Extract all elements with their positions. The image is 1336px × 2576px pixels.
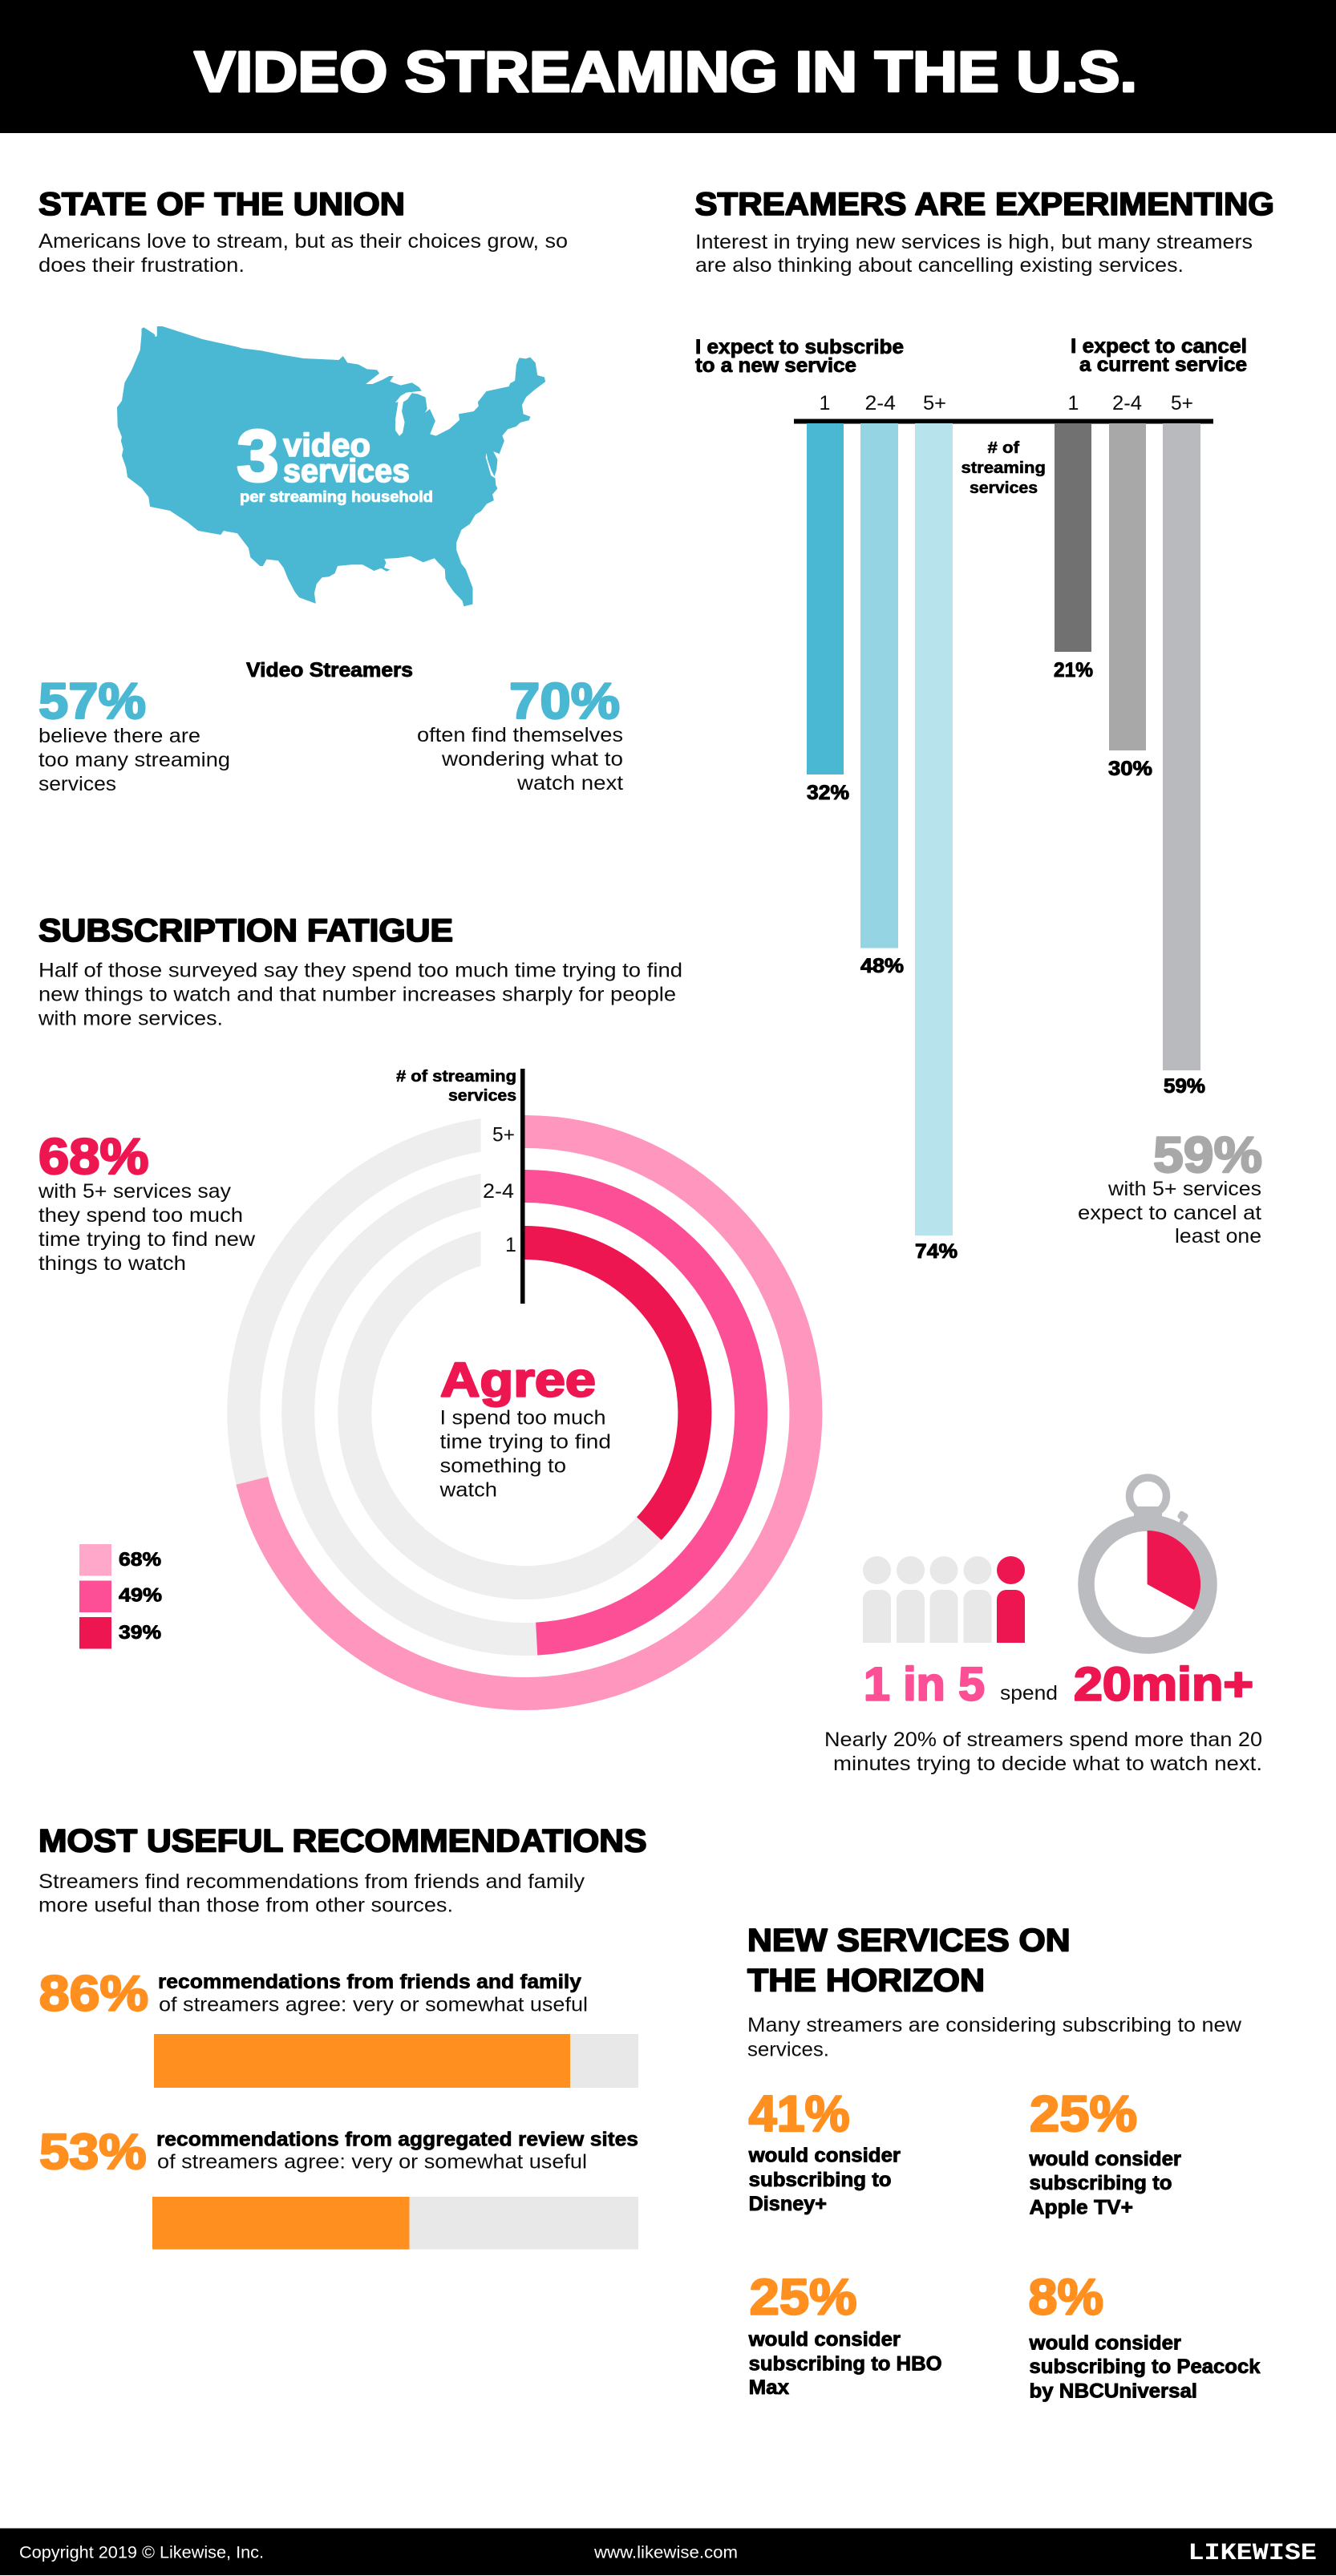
intro text: new services: Many streamers are considering subscribing to new <box>747 2014 1242 2036</box>
intro text: subscription fatigue: Half of those surveyed say they spend too much time trying to find <box>38 959 682 981</box>
stat: 57% <box>38 673 230 795</box>
intro text: most useful recommendations: Streamers find recommendations from friends and family <box>38 1870 585 1893</box>
stat: 57%: services <box>38 773 116 795</box>
label: number of streaming services <box>961 439 1046 497</box>
stat: 8% peacock: 8% <box>1028 2270 1103 2326</box>
panel: state of the union <box>38 187 623 795</box>
stat: 53% aggregated review sites: of streamers agree: very or somewhat useful <box>157 2150 587 2173</box>
bar chart: subscribe and cancel by number of services <box>794 392 1213 1263</box>
stat: 59% <box>1078 1127 1262 1248</box>
stat: 70% <box>417 673 623 795</box>
stat: 53% aggregated review sites <box>39 2125 638 2180</box>
stat: 25% apple tv+ <box>1028 2086 1181 2219</box>
map: United States with 3 video services: per streaming household <box>240 489 433 506</box>
heading: most useful recommendations: MOST USEFUL RECOMMENDATIONS <box>38 1824 646 1859</box>
radial chart: agree by number of services: services <box>448 1087 516 1105</box>
text: nearly 20% of streamers: minutes trying to decide what to watch next. <box>833 1753 1262 1775</box>
intro text: most useful recommendations <box>38 1870 585 1917</box>
center text: agree: watch <box>439 1478 497 1501</box>
bar chart: subscribe and cancel by number of services: 21% <box>1054 659 1093 681</box>
stat: 1 in 5 spend 20min+: 1 in 5 <box>864 1658 985 1711</box>
panel: subscription fatigue <box>38 913 806 1694</box>
stat: 41% disney+: 41% <box>749 2086 850 2142</box>
stat: 59%: 59% <box>1153 1127 1262 1183</box>
stat: 25% apple tv+: would consider <box>1028 2148 1181 2170</box>
bar chart: subscribe and cancel by number of services: 59% <box>1164 1075 1205 1098</box>
heading: new services on the horizon: NEW SERVICES ON <box>747 1923 1071 1959</box>
stat: 86% friends and family: of streamers agree: very or somewhat useful <box>159 1994 588 2016</box>
footer <box>0 2529 1336 2575</box>
center text: agree: I spend too much <box>439 1406 606 1429</box>
bar chart: subscribe and cancel by number of services: 74% <box>915 1240 957 1263</box>
bar chart: subscribe and cancel by number of services: 2-4 <box>1112 392 1142 415</box>
legend <box>79 1544 162 1648</box>
panel: most useful recommendations <box>38 1824 646 2250</box>
column heading: expect to subscribe: I expect to subscribe <box>695 336 904 358</box>
stat: 1 in 5 spend 20min+: 20min+ <box>1074 1658 1253 1711</box>
panel: 1 in 5 spend 20 minutes <box>824 1478 1262 1775</box>
intro text: subscription fatigue: with more services. <box>38 1007 223 1029</box>
bar chart: subscribe and cancel by number of services: 2-4 <box>864 392 896 415</box>
label: number of streaming services: services <box>970 479 1038 497</box>
stat: 70%: wondering what to <box>441 748 623 770</box>
stat: 8% peacock: subscribing to Peacock <box>1030 2356 1261 2378</box>
stat: 53% aggregated review sites: 53% <box>39 2125 147 2180</box>
stat: 53% aggregated review sites: recommendations from aggregated review sites <box>156 2129 638 2151</box>
intro text: new services <box>747 2014 1242 2061</box>
map: United States with 3 video services: 3 <box>237 415 279 497</box>
heading: new services on the horizon: THE HORIZON <box>747 1963 985 1999</box>
label: number of streaming services: streaming <box>961 459 1046 477</box>
stat: 41% disney+ <box>748 2086 901 2215</box>
label: number of streaming services: # of <box>988 439 1019 457</box>
footer: LIKEWISE <box>1188 2540 1317 2567</box>
intro text: state of the union: does their frustration. <box>38 254 245 277</box>
center text: agree: something to <box>439 1454 566 1477</box>
title banner: VIDEO STREAMING IN THE U.S. <box>194 41 1137 104</box>
panel: streamers are experimenting <box>694 187 1274 1263</box>
legend: 68% <box>119 1549 161 1571</box>
stat: 86% friends and family <box>39 1966 588 2022</box>
bar chart: subscribe and cancel by number of services: 1 <box>1068 392 1079 415</box>
stat: 25% hbo max: would consider <box>748 2328 901 2351</box>
stat: 68% <box>38 1129 256 1275</box>
stat: 41% disney+: would consider <box>748 2145 901 2167</box>
icon: five people, one highlighted <box>863 1556 1025 1643</box>
stat: 86% friends and family: 86% <box>39 1966 148 2022</box>
intro text: subscription fatigue: new things to watch and that number increases sharply for people <box>38 983 676 1005</box>
radial chart: agree by number of services: 1 <box>505 1234 516 1256</box>
center text: agree: time trying to find <box>439 1430 611 1453</box>
intro text: streamers are experimenting: are also thinking about cancelling existing services. <box>695 254 1184 277</box>
panel: new services on the horizon <box>747 1923 1261 2403</box>
bar chart: subscribe and cancel by number of services: 1 <box>820 392 830 415</box>
stat: 25% hbo max: 25% <box>750 2270 857 2326</box>
bar chart: subscribe and cancel by number of services: 5+ <box>1171 392 1193 415</box>
column heading: expect to cancel: I expect to cancel <box>1071 335 1247 358</box>
stat: 57%: too many streaming <box>38 749 230 771</box>
stat: 1 in 5 spend 20min+ <box>864 1658 1253 1711</box>
legend: 49% <box>119 1584 162 1607</box>
stat: 8% peacock: would consider <box>1028 2332 1181 2355</box>
stat: 59%: least one <box>1175 1225 1261 1248</box>
bar chart: subscribe and cancel by number of services: 5+ <box>923 392 946 415</box>
intro text: state of the union: Americans love to stream, but as their choices grow, so <box>38 230 568 253</box>
icon: stopwatch <box>1086 1478 1209 1645</box>
legend: 39% <box>119 1622 161 1644</box>
title banner <box>0 0 1336 133</box>
stat: 25% apple tv+: Apple TV+ <box>1030 2197 1133 2219</box>
stat: 68%: time trying to find new <box>38 1228 256 1251</box>
bar: 53% <box>152 2197 638 2250</box>
stat: 57%: believe there are <box>38 725 200 747</box>
stat: 25% apple tv+: subscribing to <box>1030 2172 1172 2194</box>
column heading: expect to cancel: a current service <box>1079 354 1247 376</box>
column heading: expect to cancel <box>1071 335 1247 376</box>
stat: 70%: watch next <box>516 772 623 795</box>
label: video streamers: Video Streamers <box>246 659 413 681</box>
radial chart: agree by number of services: 5+ <box>492 1124 515 1146</box>
stat: 41% disney+: Disney+ <box>749 2193 827 2215</box>
radial chart: agree by number of services: 2-4 <box>483 1180 514 1203</box>
intro text: most useful recommendations: more useful than those from other sources. <box>38 1895 453 1917</box>
stat: 68%: 68% <box>38 1129 149 1185</box>
stat: 8% peacock <box>1028 2270 1261 2403</box>
bar chart: subscribe and cancel by number of services: 30% <box>1108 758 1152 780</box>
map: United States with 3 video services <box>117 326 545 606</box>
stat: 41% disney+: subscribing to <box>749 2169 892 2191</box>
stat: 25% hbo max: subscribing to HBO <box>749 2352 942 2375</box>
stat: 8% peacock: by NBCUniversal <box>1030 2380 1197 2403</box>
intro text: state of the union <box>38 230 568 277</box>
radial chart: agree by number of services: # of streaming <box>396 1068 516 1086</box>
stat: 59%: expect to cancel at <box>1078 1202 1261 1224</box>
text: nearly 20% of streamers <box>824 1729 1262 1775</box>
stat: 25% hbo max <box>748 2270 942 2399</box>
stat: 68%: with 5+ services say <box>38 1180 232 1203</box>
stat: 86% friends and family: recommendations from friends and family <box>158 1971 581 1993</box>
bar: 86% <box>154 2034 638 2088</box>
stat: 25% apple tv+: 25% <box>1030 2086 1137 2142</box>
intro text: subscription fatigue <box>38 959 682 1029</box>
heading: streamers are experimenting: STREAMERS ARE EXPERIMENTING <box>694 187 1274 222</box>
radial chart: agree by number of services <box>244 1068 806 1694</box>
footer: www.likewise.com <box>593 2543 738 2562</box>
stat: 57%: 57% <box>38 673 146 730</box>
intro text: streamers are experimenting: Interest in trying new services is high, but many streamers <box>695 231 1253 253</box>
heading: state of the union: STATE OF THE UNION <box>38 187 405 222</box>
intro text: new services: services. <box>747 2039 829 2061</box>
column heading: expect to subscribe: to a new service <box>695 354 856 377</box>
bar chart: subscribe and cancel by number of services: 32% <box>807 782 849 804</box>
heading: new services on the horizon <box>747 1923 1071 1999</box>
center text: agree <box>439 1353 611 1501</box>
stat: 59%: with 5+ services <box>1107 1178 1261 1200</box>
stat: 68%: they spend too much <box>38 1204 243 1227</box>
text: nearly 20% of streamers: Nearly 20% of streamers spend more than 20 <box>824 1729 1262 1751</box>
stat: 70%: 70% <box>509 673 620 730</box>
heading: subscription fatigue: SUBSCRIPTION FATIGUE <box>38 913 453 948</box>
stat: 70%: often find themselves <box>417 724 623 746</box>
map: United States with 3 video services: services <box>283 452 410 489</box>
map: United States with 3 video services: video <box>283 427 370 463</box>
column heading: expect to subscribe <box>695 336 904 377</box>
stat: 1 in 5 spend 20min+: spend <box>1000 1682 1058 1705</box>
bar chart: subscribe and cancel by number of services: 48% <box>860 955 904 977</box>
center text: agree: Agree <box>440 1353 596 1407</box>
intro text: streamers are experimenting <box>695 231 1253 277</box>
footer: Copyright 2019 © Likewise, Inc. <box>19 2543 264 2562</box>
stat: 68%: things to watch <box>38 1252 186 1275</box>
stat: 25% hbo max: Max <box>749 2376 789 2399</box>
